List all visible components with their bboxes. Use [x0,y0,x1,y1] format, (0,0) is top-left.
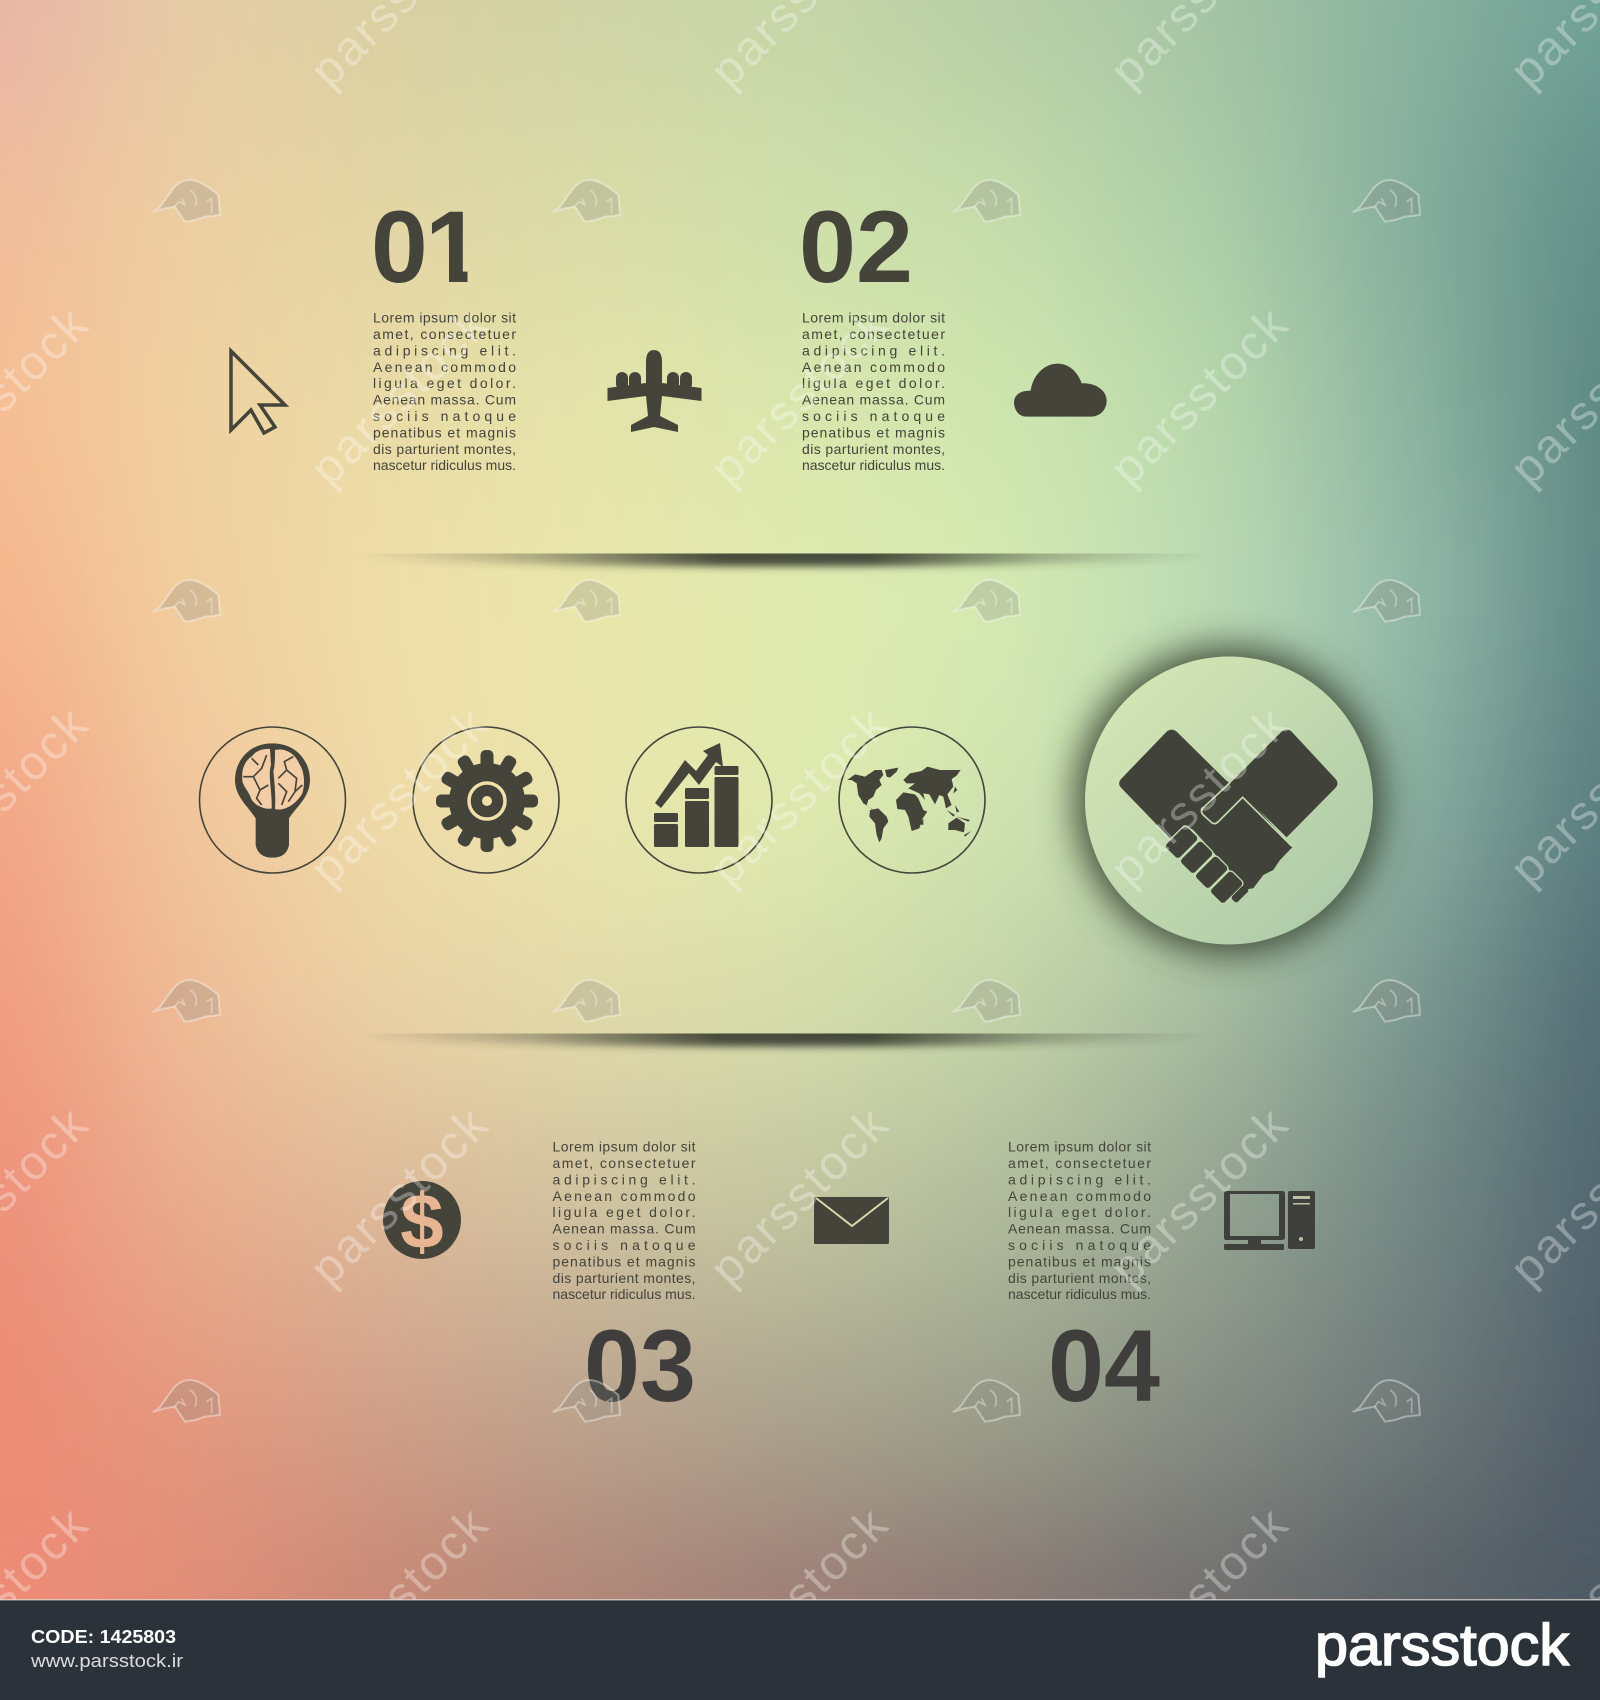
footer logo: parsstock [1315,1613,1570,1678]
section 03 text block: sociis natoque [552,1237,696,1253]
section 02 text block: ligula eget dolor. [802,375,945,391]
icon: dollar coin [383,1177,461,1265]
icon: dollar coin: $ [400,1177,444,1265]
watermark diagonal text: parsstock [1100,1098,1298,1296]
watermark diagonal text: parsstock [1100,298,1298,496]
section 01 text block: penatibus et magnis [373,424,516,440]
section 01 text block: Lorem ipsum dolor sit [373,310,516,326]
section 01 text block: Aenean massa. Cum [373,392,516,408]
section 02 text block: sociis natoque [802,408,945,424]
icon: envelope [814,1197,889,1244]
section 04 text block: adipiscing elit. [1008,1171,1151,1187]
section 04 text block: nascetur ridiculus mus. [1008,1286,1151,1302]
icon: gear [413,727,559,873]
section 01 text block: dis parturient montes, [373,441,516,457]
section 04 text block: penatibus et magnis [1008,1253,1151,1269]
section 02 text block: adipiscing elit. [802,342,945,358]
section 01 text block: adipiscing elit. [373,342,516,358]
watermark diagonal text: parsstock [300,698,498,896]
section 02 text block: Aenean massa. Cum [802,392,945,408]
icon: cloud [1014,364,1107,417]
section 01 text block: amet, consectetuer [373,326,516,342]
icon: rising bar chart [626,727,772,873]
section 04 text block: Lorem ipsum dolor sit [1008,1139,1151,1155]
section 01 text block [373,310,516,473]
watermark diagonal text: parsstock [700,1098,898,1296]
watermark diagonal text: parsstock [300,1098,498,1296]
section 01 number: 0 [371,190,428,304]
section 01 number [375,210,468,283]
section 01 text block: Aenean commodo [373,359,516,375]
watermark diagonal text: parsstock [300,298,498,496]
icon: airplane [608,350,702,432]
icon: cursor arrow [231,351,285,433]
section 03 text block: penatibus et magnis [552,1253,696,1269]
section 03 text block: ligula eget dolor. [552,1204,696,1220]
section 02 text block [802,310,945,473]
icon: world map [839,727,985,873]
icon: desktop computer [1224,1191,1315,1250]
section 02 text block: amet, consectetuer [802,326,945,342]
watermark diagonal text: parsstock [700,1498,898,1696]
watermark diagonal text: parsstock [700,298,898,496]
section 03 text block: Lorem ipsum dolor sit [552,1139,696,1155]
section 04 text block: sociis natoque [1008,1237,1151,1253]
section 04 number: 04 [1048,1309,1160,1423]
footer bar [0,1599,1600,1700]
section 03 text block: nascetur ridiculus mus. [552,1286,696,1302]
section 01 text block: sociis natoque [373,408,516,424]
section 03 text block: adipiscing elit. [552,1171,696,1187]
icon: large handshake circle [1076,648,1382,954]
section 02 text block: Lorem ipsum dolor sit [802,310,945,326]
section 01 number: 1 [425,190,482,304]
divider shadow upper [384,554,1188,573]
section 02 text block: penatibus et magnis [802,424,945,440]
section 01 text block: nascetur ridiculus mus. [373,457,516,473]
section 01 text block: ligula eget dolor. [373,375,516,391]
section 03 text block [552,1139,696,1302]
section 04 text block: Aenean massa. Cum [1008,1221,1151,1237]
section 03 text block: dis parturient montes, [552,1270,696,1286]
divider shadow lower [384,1034,1184,1053]
footer code: CODE: 1425803 [31,1627,176,1647]
section 04 text block: Aenean commodo [1008,1188,1151,1204]
section 03 text block: Aenean massa. Cum [552,1221,696,1237]
watermark diagonal text: parsstock [1100,1498,1298,1696]
watermark diagonal text: parsstock [700,698,898,896]
section 02 text block: dis parturient montes, [802,441,945,457]
section 03 text block: amet, consectetuer [552,1155,696,1171]
watermark diagonal text: parsstock [1100,698,1298,896]
section 04 text block: dis parturient montes, [1008,1270,1151,1286]
section 03 text block: Aenean commodo [552,1188,696,1204]
section 04 text block: amet, consectetuer [1008,1155,1151,1171]
section 02 number: 02 [799,190,913,304]
icon: light bulb with brain [200,727,346,873]
section 03 number: 03 [584,1309,696,1423]
section 02 text block: nascetur ridiculus mus. [802,457,945,473]
section 04 text block [1008,1139,1151,1302]
section 02 text block: Aenean commodo [802,359,945,375]
section 04 text block: ligula eget dolor. [1008,1204,1151,1220]
watermark elephant logos [153,180,1420,1422]
footer url: www.parsstock.ir [30,1651,183,1671]
watermark diagonal text: parsstock [300,1498,498,1696]
